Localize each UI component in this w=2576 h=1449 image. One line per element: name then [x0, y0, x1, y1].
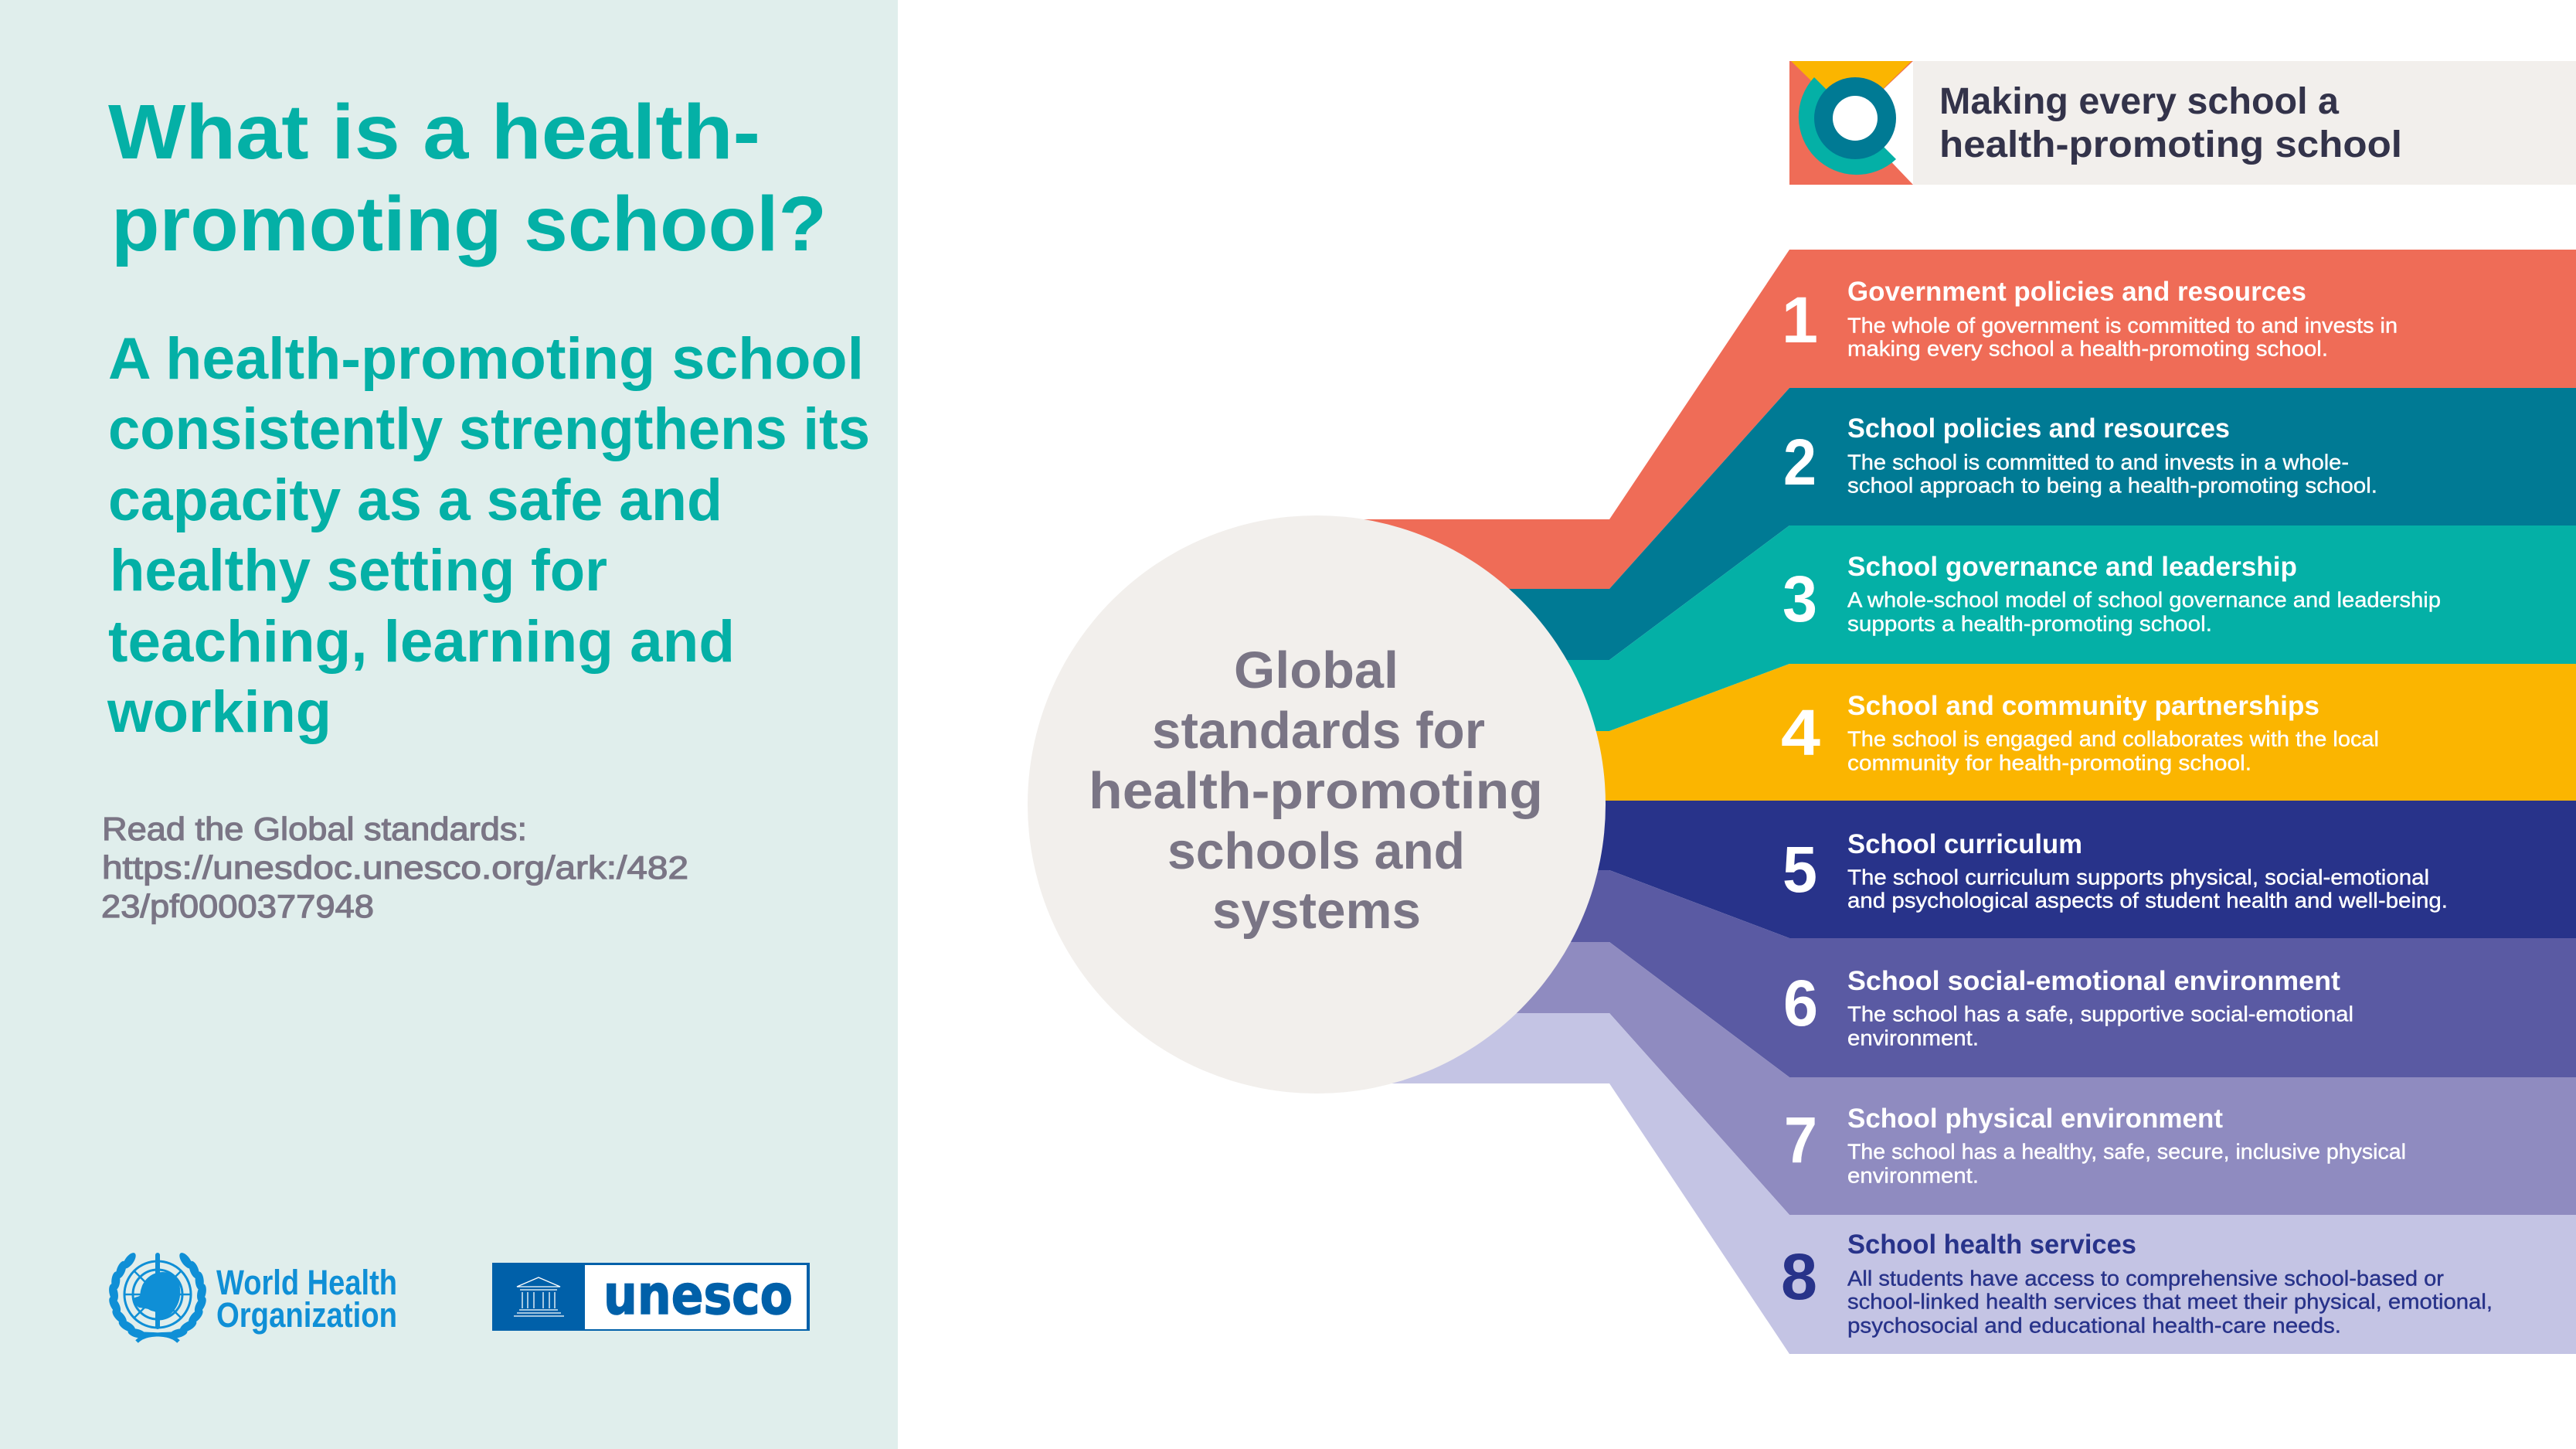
heading and description 1: making every school a health-promoting school.	[1847, 337, 2328, 360]
heading and description 7: The school has a healthy, safe, secure, inclusive physical	[1847, 1139, 2406, 1164]
icon: campaign logo	[1789, 61, 1913, 185]
icon: UNESCO temple	[514, 1277, 564, 1316]
band 4: community partnerships	[1313, 664, 2576, 801]
heading and description 7: environment.	[1847, 1164, 1979, 1187]
heading and description 5: School curriculum	[1847, 829, 2082, 859]
definition text: healthy setting for	[110, 538, 607, 604]
heading and description 1: The whole of government is committed to and invests in	[1847, 314, 2398, 337]
WHO wordmark: Organization	[216, 1295, 397, 1335]
WHO wordmark: World Health	[216, 1263, 397, 1302]
circle text: Global	[1234, 641, 1398, 699]
number 5: 5	[1782, 833, 1817, 906]
heading and description 2: School policies and resources	[1847, 413, 2230, 444]
heading and description 6: environment.	[1847, 1026, 1979, 1049]
band 7: physical environment	[1313, 942, 2576, 1215]
heading and description 8: School health services	[1847, 1230, 2136, 1260]
band 5: school curriculum	[1313, 801, 2576, 938]
banner text	[1939, 81, 2402, 165]
heading and description 4: community for health-promoting school.	[1847, 751, 2251, 774]
heading and description 6: School social-emotional environment	[1847, 966, 2340, 996]
banner text: Making every school a	[1939, 81, 2339, 122]
heading and description 4	[1847, 691, 2379, 774]
definition text	[107, 326, 870, 745]
number 4: 4	[1781, 696, 1820, 769]
heading and description 8: All students have access to comprehensive school-based or	[1847, 1266, 2444, 1291]
banner text: health-promoting school	[1939, 124, 2402, 165]
heading and description 6: The school has a safe, supportive social-emotional	[1847, 1002, 2353, 1026]
number 7: 7	[1784, 1104, 1817, 1176]
circle text: systems	[1212, 882, 1421, 940]
definition text: working	[107, 679, 331, 745]
heading and description 1	[1847, 277, 2398, 360]
circle text: health-promoting	[1089, 762, 1543, 820]
circle text	[1089, 641, 1543, 940]
heading and description 8: school-linked health services that meet their physical, emotional,	[1847, 1289, 2493, 1314]
definition text: consistently strengthens its	[108, 396, 870, 462]
title: promoting school?	[111, 181, 827, 267]
heading and description 4: The school is engaged and collaborates with the local	[1847, 726, 2379, 751]
heading and description 2	[1847, 413, 2377, 498]
heading and description 5	[1847, 829, 2448, 912]
central circle: global standards	[1028, 515, 1606, 1094]
heading and description 4: School and community partnerships	[1847, 691, 2319, 721]
band 3: school governance	[1313, 526, 2576, 731]
heading and description 3: A whole-school model of school governance and leadership	[1847, 587, 2441, 612]
definition text: A health-promoting school	[108, 326, 864, 392]
title: What is a health-	[108, 89, 760, 175]
heading and description 3: School governance and leadership	[1847, 552, 2297, 582]
band 1: government policies	[1313, 250, 2576, 589]
heading and description 5: The school curriculum supports physical, social-emotional	[1847, 866, 2429, 889]
band 6: social-emotional environment	[1313, 870, 2576, 1077]
UNESCO wordmark: unesco	[603, 1264, 793, 1327]
logo: UNESCO	[492, 1263, 810, 1331]
panel: left introduction	[0, 0, 898, 1449]
heading and description 5: and psychological aspects of student health and well-being.	[1847, 889, 2448, 912]
logo: World Health Organization	[107, 1250, 397, 1342]
link text: https://unesdoc.unesco.org/ark:/482	[102, 849, 688, 886]
header banner: making every school	[1789, 61, 2576, 185]
band 2: school policies	[1313, 388, 2576, 660]
heading and description 3	[1847, 552, 2441, 635]
number 8: 8	[1781, 1240, 1817, 1313]
heading and description 3: supports a health-promoting school.	[1847, 612, 2212, 635]
heading and description 8	[1847, 1230, 2493, 1337]
band 8: school health services	[1313, 1013, 2576, 1354]
number 2: 2	[1783, 426, 1816, 498]
circle text: schools and	[1167, 822, 1465, 880]
icon: WHO emblem	[107, 1250, 209, 1342]
definition text: teaching, learning and	[108, 609, 735, 675]
heading and description 7	[1847, 1104, 2406, 1187]
number 3: 3	[1782, 563, 1817, 635]
circle text: standards for	[1152, 702, 1485, 760]
number 6: 6	[1783, 967, 1818, 1039]
WHO wordmark	[216, 1263, 397, 1335]
heading and description 7: School physical environment	[1847, 1104, 2223, 1134]
definition text: capacity as a safe and	[108, 468, 722, 533]
heading and description 6	[1847, 966, 2353, 1049]
heading and description 2: The school is committed to and invests in a whole-	[1847, 450, 2349, 474]
link text: Read the Global standards:	[102, 811, 527, 847]
heading and description 8: psychosocial and educational health-care needs.	[1847, 1314, 2341, 1337]
heading and description 1: Government policies and resources	[1847, 277, 2306, 307]
number 1: 1	[1782, 284, 1818, 356]
heading and description 2: school approach to being a health-promoting school.	[1847, 473, 2377, 498]
title	[108, 89, 827, 267]
link text	[101, 811, 688, 924]
link text: 23/pf0000377948	[101, 888, 374, 924]
